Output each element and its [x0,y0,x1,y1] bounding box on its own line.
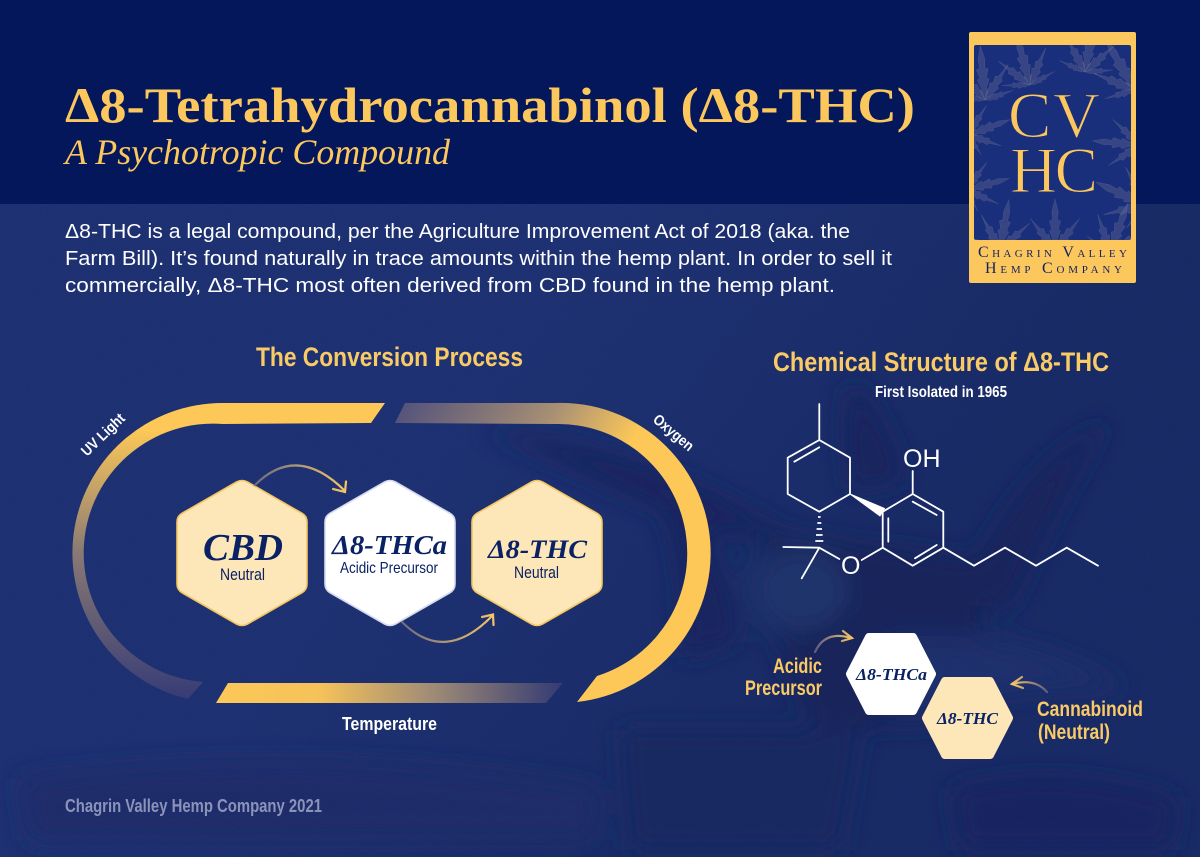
label: UV light: UV Light [78,410,129,460]
intro paragraph: commercially, Δ8-THC most often derived from CBD found in the hemp plant. [65,275,835,297]
hexagon: Δ8-THC: Neutral [514,563,559,582]
hexagon: Δ8-THC [472,480,602,626]
hexagon: Δ8-THCa key [850,637,932,711]
label: acidic precursor: Acidic [773,655,822,678]
intro paragraph: Farm Bill). It’s found naturally in trace amounts within the hemp plant. In order to sell it [65,248,892,270]
arrow: to Δ8-THC key [1012,677,1047,692]
label: oxygen: Oxygen [649,411,697,455]
logo: Chagrin Valley Hemp Company: CV [1008,80,1100,152]
label: acidic precursor: Precursor [745,677,822,700]
heading: the conversion process: The Conversion Process [256,342,523,372]
hexagon: Δ8-THCa [325,480,455,626]
label: cannabinoid neutral: Cannabinoid [1037,698,1143,721]
footer credit: Chagrin Valley Hemp Company 2021 [65,796,322,816]
logo: Chagrin Valley Hemp Company: Chagrin Valley [978,244,1127,261]
hexagon: Δ8-THC key: Δ8-THC [936,709,999,728]
logo: Chagrin Valley Hemp Company: Hemp Company [985,260,1122,277]
hexagon: Δ8-THC: Δ8-THC [487,535,588,564]
arrow: CBD to Δ8-THCa [255,465,346,492]
arc: UV light [72,403,385,699]
label: acidic precursor [745,655,822,700]
conversion cycle diagram [72,403,711,734]
logo: Chagrin Valley Hemp Company [969,32,1136,283]
label: cannabinoid neutral: (Neutral) [1038,721,1110,744]
intro paragraph [65,221,892,297]
logo: Chagrin Valley Hemp Company: HC [1010,135,1098,207]
arc: oxygen [395,403,711,702]
intro paragraph: Δ8-THC is a legal compound, per the Agriculture Improvement Act of 2018 (aka. the [65,221,850,243]
hexagon: Δ8-THCa: Acidic Precursor [340,560,439,577]
header band [0,0,1200,204]
hexagon: Δ8-THC key [926,681,1009,755]
title: Δ8-Tetrahydrocannabinol (Δ8-THC) [65,77,915,133]
hexagon: CBD: CBD [203,527,283,569]
subtitle: A Psychotropic Compound [63,132,451,172]
hexagon: Δ8-THCa: Δ8-THCa [331,530,447,560]
heading: chemical structure: Chemical Structure of Δ8-THC [773,347,1109,377]
hexagon: Δ8-THCa key: Δ8-THCa [855,665,928,684]
label: temperature: Temperature [342,714,437,734]
hexagon: CBD: Neutral [220,565,265,584]
label: cannabinoid neutral [1037,698,1143,744]
chemical structure diagram [783,404,1098,578]
atom label: OH: OH [903,445,940,473]
legend: hexagon key [745,631,1143,755]
arrow: to Δ8-THCa key [815,631,852,652]
arrow: Δ8-THCa to Δ8-THC [402,614,494,642]
hexagon: CBD [177,480,307,626]
subheading: first isolated: First Isolated in 1965 [875,384,1007,401]
atom label: O: O [841,552,860,580]
bar: temperature [216,683,563,703]
